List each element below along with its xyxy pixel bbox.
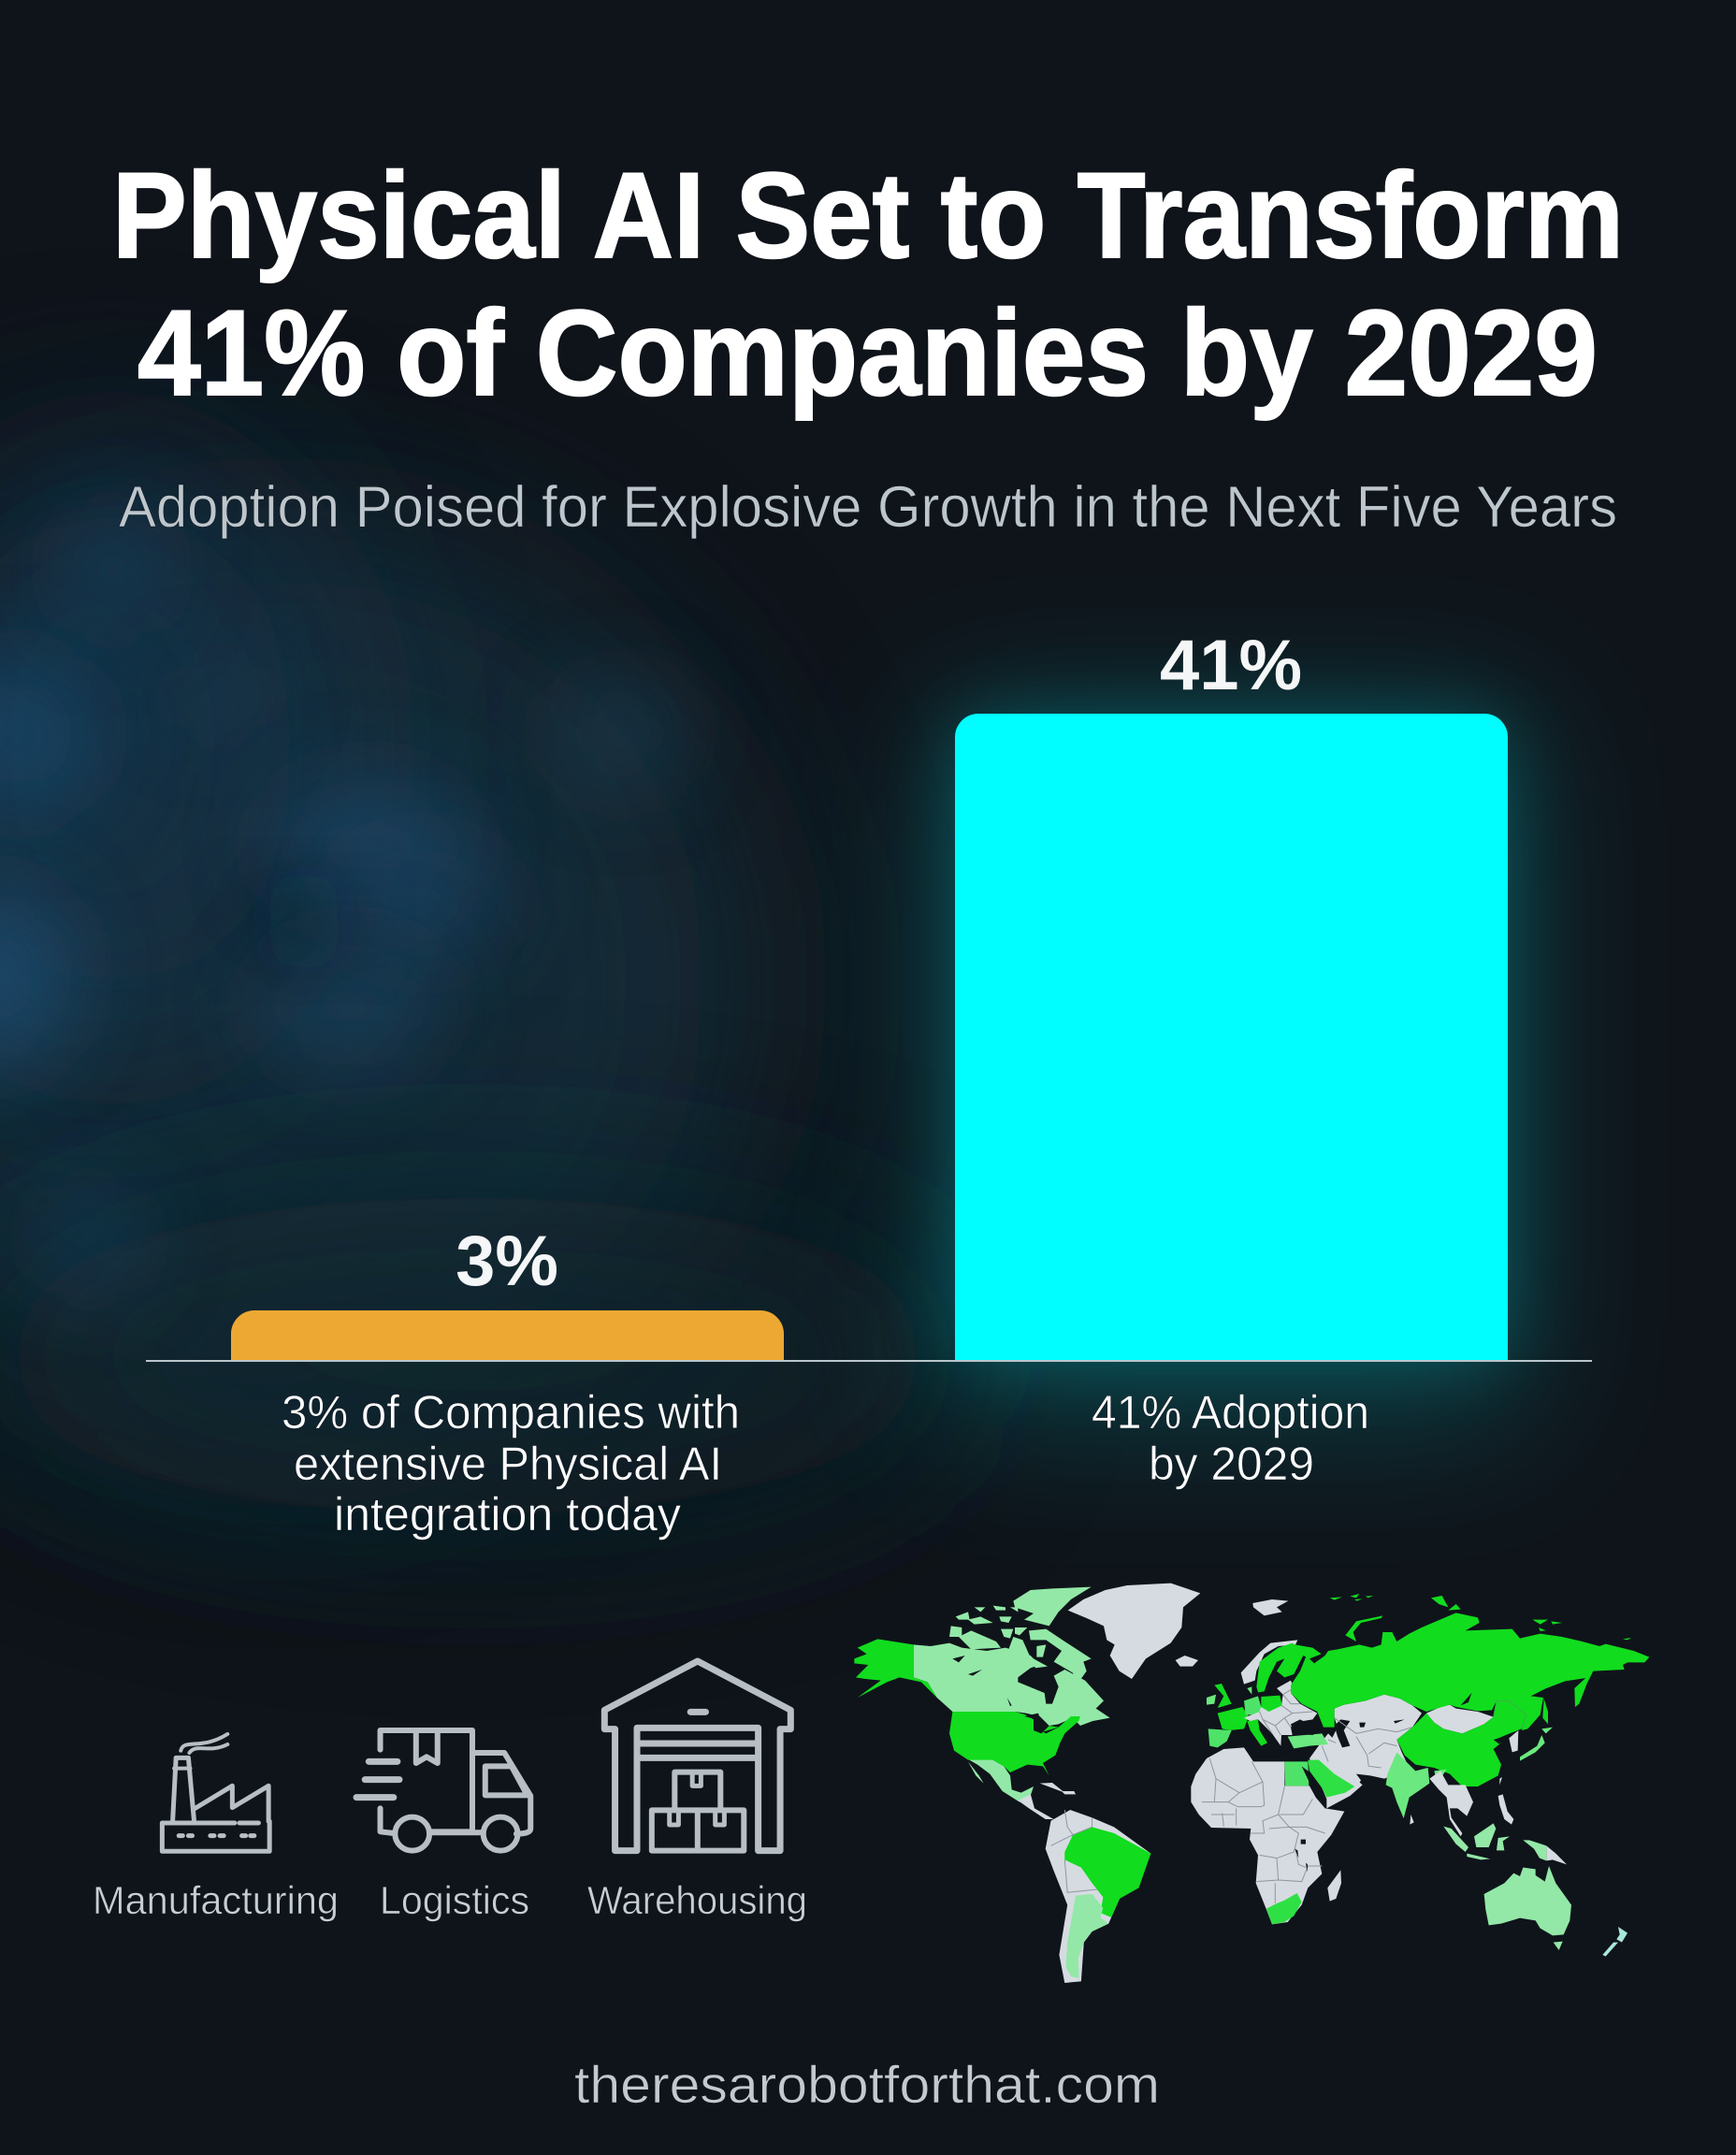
lakes — [952, 1656, 1059, 1733]
industries — [93, 1661, 807, 1922]
greenland and iceland — [1040, 1584, 1200, 1794]
saudi arabia and south africa — [1266, 1760, 1354, 1924]
africa — [1191, 1747, 1567, 1924]
label: 3% bar: 3% of Companies with — [282, 1386, 740, 1439]
subtitle: Adoption Poised for Explosive Growth in the Next Five Years — [119, 475, 1617, 540]
india — [1386, 1752, 1429, 1818]
label: manufacturing: Manufacturing — [93, 1878, 339, 1922]
argentina — [1065, 1894, 1108, 1978]
icon: factory — [162, 1734, 269, 1851]
lakes and red sea — [1295, 1766, 1326, 1873]
gray countries — [1241, 1599, 1518, 1799]
alaska and usa — [854, 1639, 1080, 1775]
map: africa, south asia and oceania — [1191, 1747, 1628, 1957]
label: 3% bar: integration today — [334, 1488, 681, 1540]
title: 41% of Companies by 2029 — [137, 284, 1598, 421]
value: 3%: 3% — [456, 1222, 558, 1301]
brazil — [1064, 1827, 1150, 1917]
light green countries — [1207, 1686, 1553, 1784]
background haze — [0, 440, 954, 1515]
label: 3% bar: extensive Physical AI — [294, 1438, 722, 1490]
icon: delivery truck — [356, 1730, 530, 1851]
title: Physical AI Set to Transform — [112, 147, 1624, 283]
map: north america and greenland — [854, 1584, 1200, 1802]
new zealand — [1602, 1927, 1628, 1957]
gray countries — [1018, 1794, 1150, 1983]
inland seas — [1291, 1693, 1504, 1747]
canada and mexico — [914, 1587, 1110, 1802]
label: 3% bar — [282, 1386, 740, 1540]
mid green countries — [1208, 1696, 1261, 1747]
glow: 41% bar — [935, 714, 1527, 1425]
egypt — [1284, 1761, 1309, 1786]
title — [112, 147, 1624, 421]
bar: 41% adoption — [955, 714, 1508, 1361]
label: logistics: Logistics — [380, 1878, 529, 1922]
bright countries — [1214, 1594, 1649, 1786]
world map — [854, 1584, 1649, 1983]
label: warehousing: Warehousing — [587, 1878, 807, 1922]
light green countries — [1443, 1823, 1571, 1950]
label: 41% bar — [1092, 1386, 1369, 1490]
borders — [1051, 1810, 1097, 1892]
bar: 3% today — [231, 1310, 784, 1361]
map: eurasia — [1207, 1594, 1649, 1799]
label: 41% bar: 41% Adoption — [1092, 1386, 1369, 1439]
axis line — [146, 1360, 1592, 1362]
borders — [1260, 1690, 1526, 1768]
value: 41%: 41% — [1160, 626, 1302, 705]
alps — [1244, 1712, 1265, 1721]
africa borders — [1202, 1758, 1325, 1903]
icon: warehouse — [604, 1661, 790, 1851]
label: 41% bar: by 2029 — [1149, 1438, 1314, 1490]
footer: website: theresarobotforthat.com — [574, 2055, 1160, 2114]
bar chart — [146, 626, 1592, 1540]
map: central and south america — [1018, 1794, 1150, 1983]
